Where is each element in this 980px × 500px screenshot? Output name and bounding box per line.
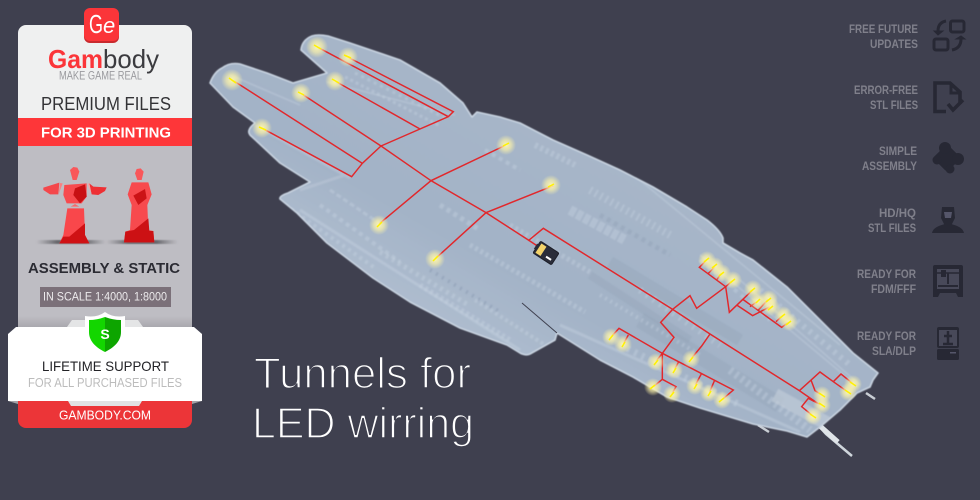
feature: hd/hq files: STL FILES: [868, 223, 916, 235]
feature: ready for sla: SLA/DLP: [872, 346, 916, 358]
LED wiring: stern section: [232, 47, 553, 259]
feature: hd/hq files: HD/HQ: [879, 208, 916, 220]
feature: simple assembly: ASSEMBLY: [862, 161, 917, 173]
icon: fdm printer: [933, 265, 963, 297]
icon: shield: S: [100, 326, 110, 342]
feature: error-free files: STL FILES: [870, 100, 918, 112]
logo badge: G: [89, 9, 103, 39]
icon: shield: [85, 312, 125, 352]
icon: sla printer: [937, 327, 959, 360]
hull surface details: [230, 73, 860, 432]
support title: LIFETIME SUPPORT: [42, 358, 169, 374]
icon: puzzle: [932, 142, 964, 174]
band label: FOR 3D PRINTING: [41, 124, 171, 142]
feature: ready for fdm: READY FOR: [857, 269, 917, 281]
figure shadows: [36, 240, 178, 244]
feature: ready for sla: [857, 331, 917, 358]
brand name: body: [103, 44, 159, 74]
logo badge: [84, 8, 119, 43]
scale tag: [40, 287, 171, 307]
LED lights: [221, 36, 862, 425]
heading: PREMIUM FILES: [41, 94, 171, 114]
feature: error-free files: ERROR-FREE: [854, 85, 918, 97]
caption: Tunnels for: [254, 349, 471, 398]
feature: free future updates: FREE FUTURE: [849, 24, 918, 36]
feature: simple assembly: SIMPLE: [879, 146, 917, 158]
figure: static pose: [124, 168, 154, 242]
panel: header: [18, 25, 192, 118]
icon: bust: [932, 207, 964, 233]
LED wiring: bow section: [528, 228, 853, 416]
spaceship hull: [210, 35, 878, 456]
subtitle: ASSEMBLY & STATIC: [28, 261, 181, 277]
hull silhouette: [210, 35, 878, 437]
tagline: MAKE GAME REAL: [59, 70, 142, 82]
red band: [18, 118, 192, 146]
feature: hd/hq files: [868, 208, 916, 235]
scale tag: IN SCALE 1:4000, 1:8000: [43, 292, 167, 304]
feature: free future updates: [849, 24, 918, 51]
panel: footer: [18, 396, 192, 428]
feature: ready for fdm: [857, 269, 917, 296]
support ribbon: [8, 327, 202, 401]
feature: error-free files: [854, 85, 918, 112]
feature: ready for sla: READY FOR: [857, 331, 917, 343]
feature: free future updates: UPDATES: [870, 39, 918, 51]
figure: arms raised: [43, 167, 107, 243]
ribbon folds: [8, 320, 202, 406]
caption: LED wirring: [252, 399, 474, 448]
brand name: Gam: [48, 44, 103, 74]
support note: FOR ALL PURCHASED FILES: [28, 376, 182, 390]
left promo panel: [8, 8, 202, 428]
caption: [252, 349, 474, 448]
feature: ready for fdm: FDM/FFF: [871, 284, 916, 296]
feature: simple assembly: [862, 146, 917, 173]
hull nose spike: [758, 393, 875, 456]
icon: battery: [532, 240, 559, 265]
logo badge: e: [103, 13, 115, 38]
icon: checked file: [935, 83, 963, 112]
panel: figures background: [18, 146, 192, 331]
icon: updates: [934, 21, 965, 50]
footer link: GAMBODY.COM: [59, 408, 151, 422]
features list: [849, 21, 965, 360]
brand name: [48, 44, 159, 74]
